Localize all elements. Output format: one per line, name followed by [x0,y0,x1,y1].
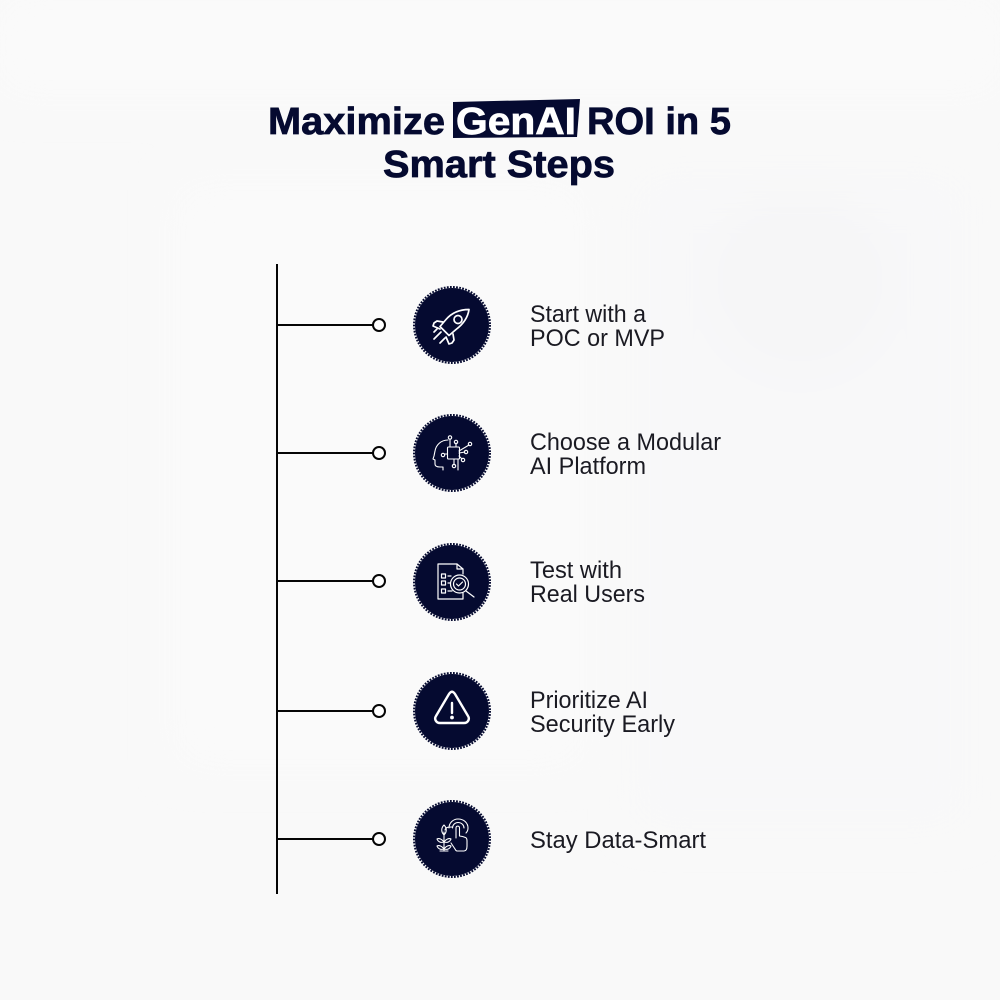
title word: Maximize: Maximize [268,101,445,143]
label 2: AI Platform [530,453,646,480]
label 3 [530,557,645,608]
label 2: Choose a Modular [530,429,721,456]
connector 2 [277,447,385,459]
step 3 [277,544,645,620]
label 1 [530,301,665,352]
label 5: Stay Data-Smart [530,827,706,854]
label 3: Test with [530,557,622,584]
title line 2: Smart Steps [383,144,615,186]
connector 5 [277,833,385,845]
badge 3 [414,544,490,620]
step 4 [277,673,675,749]
label 2 [530,429,721,480]
label 1: Start with a [530,301,647,328]
timeline vertical line [276,264,278,894]
badge 4 [414,673,490,749]
title word: ROI in 5: ROI in 5 [587,101,731,143]
icon: document with magnifier [438,564,474,599]
connector 1 [277,319,385,331]
badge 5 [414,801,490,877]
title [268,99,731,186]
title word: GenAI: GenAI [456,101,576,143]
label 4: Prioritize AI [530,687,648,714]
label 4 [530,687,675,738]
connector 4 [277,705,385,717]
step 2 [277,415,721,491]
title highlight: GenAI [453,99,580,138]
connector 3 [277,575,385,587]
icon: warning triangle [435,692,469,723]
icon: rocket [433,310,469,344]
label 3: Real Users [530,581,645,608]
label 4: Security Early [530,711,675,738]
badge 2 [414,415,490,491]
step 1 [277,287,665,363]
step 5 [277,801,706,877]
icon: AI head [433,436,472,470]
badge 1 [414,287,490,363]
label 1: POC or MVP [530,325,665,352]
icon: plant and touch [437,819,468,851]
